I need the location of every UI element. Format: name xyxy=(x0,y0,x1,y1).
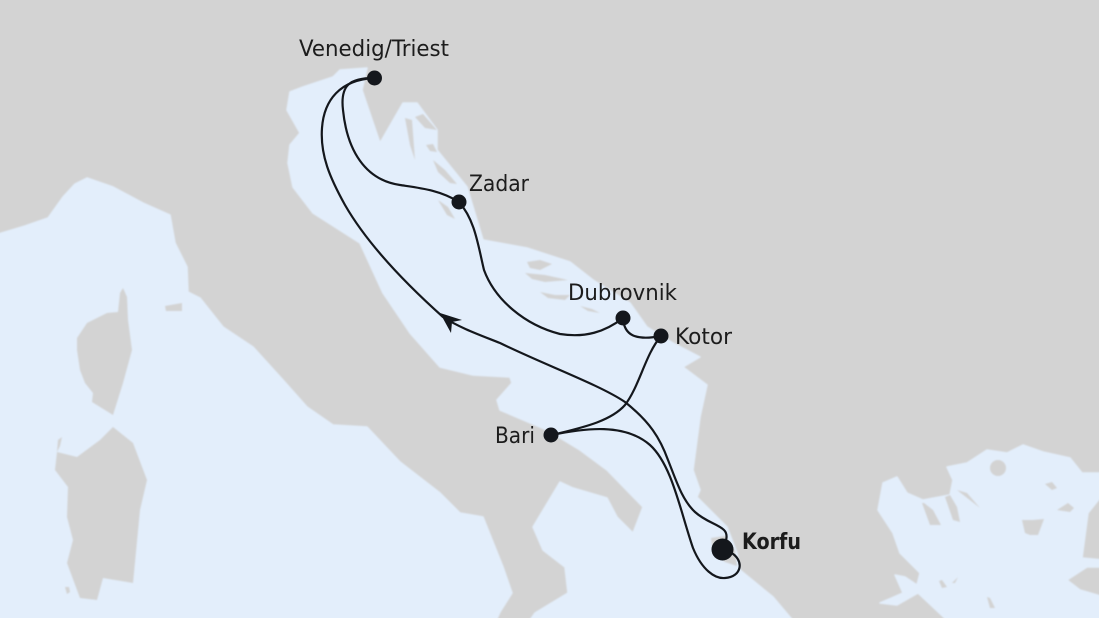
route: Zadar to Dubrovnik xyxy=(459,202,623,335)
island: Pag xyxy=(433,160,457,184)
route: Dubrovnik to Kotor xyxy=(623,318,661,338)
label: Zadar: Zadar xyxy=(469,172,530,197)
marker: Venedig/Triest xyxy=(367,70,382,86)
island: Skyros xyxy=(987,597,995,608)
sea: Adriatic and Ionian xyxy=(287,68,795,618)
marker: Kotor xyxy=(654,328,668,344)
label: Dubrovnik: Dubrovnik xyxy=(568,281,677,306)
route: Bari to Korfu xyxy=(552,429,740,578)
route: Korfu to Venedig/Triest xyxy=(322,78,727,549)
island: Krk xyxy=(415,114,437,130)
island: Lesbos xyxy=(1022,519,1044,535)
island: Skopelos xyxy=(952,577,958,583)
island: Corfu xyxy=(711,536,737,566)
marker: Zadar xyxy=(452,194,466,210)
island: Asinara xyxy=(57,437,62,452)
sea: Ligurian and Tyrrhenian xyxy=(0,178,512,618)
island: San Pietro xyxy=(65,587,70,594)
route: Kotor to Bari xyxy=(552,336,661,435)
marker: Dubrovnik xyxy=(616,310,630,326)
direction arrow xyxy=(440,313,462,333)
island: Lemnos xyxy=(1045,482,1057,490)
peninsula: Athos xyxy=(957,490,980,508)
marker: Bari xyxy=(544,428,558,442)
island: Elba xyxy=(165,303,182,311)
route: Venedig to Zadar xyxy=(342,78,459,202)
island: Rab xyxy=(426,144,437,152)
label: Korfu: Korfu xyxy=(742,530,801,555)
island: Skiathos xyxy=(939,580,947,588)
island: Korcula xyxy=(540,292,570,300)
island: Sardinia xyxy=(55,427,147,600)
island: Imbros xyxy=(1057,503,1074,512)
peninsula: Chalkidiki west xyxy=(922,503,941,525)
island: Brac xyxy=(527,260,552,270)
islands xyxy=(55,114,1074,608)
port markers xyxy=(367,70,734,560)
marker: Korfu xyxy=(712,538,734,560)
sea: Aegean xyxy=(878,445,1099,618)
label: Kotor: Kotor xyxy=(675,325,733,350)
island: Corsica xyxy=(77,288,132,415)
island: Dugi Otok xyxy=(438,200,455,219)
island: Mljet xyxy=(580,306,600,313)
label: Venedig/Triest: Venedig/Triest xyxy=(299,37,449,62)
island: Cres xyxy=(405,118,415,160)
island: Thasos xyxy=(990,460,1006,476)
peninsula: Chalkidiki middle xyxy=(945,495,960,522)
island: Hvar xyxy=(525,273,568,282)
label: Bari: Bari xyxy=(495,424,535,449)
port labels xyxy=(299,37,801,555)
route lines xyxy=(322,78,740,578)
